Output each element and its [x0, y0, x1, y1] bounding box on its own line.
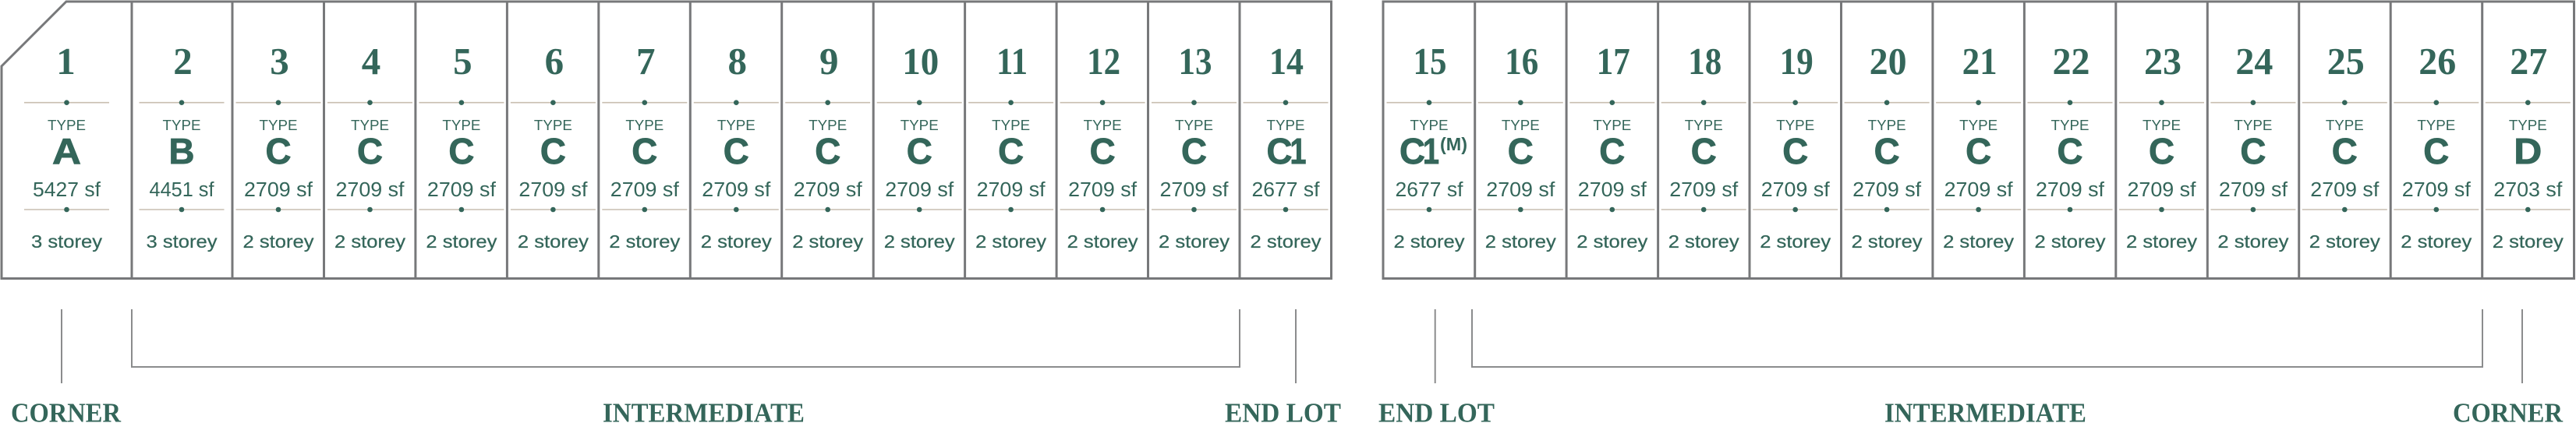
unit 17: 2 storey	[1576, 231, 1648, 252]
unit 19: C	[1782, 131, 1808, 171]
unit 18	[1661, 40, 1746, 252]
unit 13: C	[1181, 131, 1207, 171]
unit 21: 2 storey	[1943, 231, 2015, 252]
unit 24	[2210, 40, 2295, 252]
unit 18: 2 storey	[1668, 231, 1739, 252]
unit 23	[2119, 40, 2204, 252]
unit 16: C	[1508, 131, 1534, 171]
unit 1: 5427 sf	[33, 179, 101, 201]
unit 13	[1152, 40, 1237, 252]
unit 12: 12	[1087, 40, 1120, 83]
unit 16: 2 storey	[1485, 231, 1556, 252]
unit 11: 2 storey	[975, 231, 1047, 252]
unit 3: TYPE	[260, 117, 297, 133]
unit 20: 20	[1870, 40, 1907, 83]
unit 26: C	[2423, 131, 2449, 171]
unit 7: 7	[636, 40, 656, 83]
unit 7: 2 storey	[609, 231, 681, 252]
unit 19: 2709 sf	[1761, 179, 1831, 201]
unit 19: 19	[1780, 40, 1813, 83]
unit 15: 1	[1423, 131, 1439, 171]
unit 27: D	[2514, 131, 2542, 171]
unit 18: 2709 sf	[1669, 179, 1739, 201]
unit 11: 2709 sf	[977, 179, 1046, 201]
unit 25: C	[2332, 131, 2358, 171]
unit 8: TYPE	[717, 117, 755, 133]
unit 20: C	[1874, 131, 1900, 171]
unit 22: TYPE	[2051, 117, 2089, 133]
unit 8: 2709 sf	[702, 179, 771, 201]
unit 22	[2027, 40, 2113, 252]
unit 11	[968, 40, 1053, 252]
unit 26: 26	[2419, 40, 2456, 83]
unit 15: (M)	[1440, 134, 1467, 154]
unit 23: C	[2149, 131, 2174, 171]
unit 5	[419, 40, 504, 252]
unit 6: TYPE	[534, 117, 572, 133]
unit 2: 2	[173, 40, 193, 83]
unit 4: C	[357, 131, 383, 171]
bracket: right intermediate	[1472, 309, 2482, 367]
unit 12: 2 storey	[1067, 231, 1138, 252]
unit 22: 2 storey	[2034, 231, 2106, 252]
unit 13: 2 storey	[1159, 231, 1230, 252]
unit 15: TYPE	[1410, 117, 1448, 133]
unit 24: TYPE	[2234, 117, 2272, 133]
unit 6: 2709 sf	[518, 179, 588, 201]
unit 4	[327, 40, 412, 252]
unit 25: 25	[2327, 40, 2365, 83]
unit 15: 15	[1413, 40, 1447, 83]
unit 7: C	[632, 131, 657, 171]
unit 15: C	[1399, 131, 1425, 171]
unit 23: 23	[2144, 40, 2181, 83]
tick: left end lot	[1295, 309, 1297, 383]
unit 16	[1478, 40, 1563, 252]
unit 3: 3	[270, 40, 289, 83]
unit 12: TYPE	[1084, 117, 1122, 133]
unit 8: 8	[728, 40, 747, 83]
unit 12: 2709 sf	[1068, 179, 1138, 201]
unit 21: TYPE	[1959, 117, 1997, 133]
unit 14: 14	[1269, 40, 1304, 83]
bracket: left intermediate	[132, 309, 1240, 367]
unit 25: TYPE	[2326, 117, 2364, 133]
unit 2: B	[168, 131, 195, 171]
unit 4: 4	[362, 40, 380, 83]
unit 21: C	[1966, 131, 1991, 171]
unit 5: 2709 sf	[427, 179, 497, 201]
unit 9: TYPE	[809, 117, 847, 133]
unit 7: 2709 sf	[610, 179, 680, 201]
unit 10: 10	[902, 40, 939, 83]
unit 20	[1845, 40, 1930, 252]
unit 14: 2677 sf	[1252, 179, 1320, 201]
unit 10: 2709 sf	[885, 179, 954, 201]
building outline: units 1 to 14	[2, 2, 1332, 279]
unit 2: 3 storey	[146, 231, 218, 252]
unit 24: C	[2240, 131, 2266, 171]
unit 26: 2709 sf	[2402, 179, 2472, 201]
unit 23: TYPE	[2143, 117, 2181, 133]
unit 17	[1569, 40, 1654, 252]
unit 21: 21	[1962, 40, 1997, 83]
unit 4: 2709 sf	[335, 179, 405, 201]
unit 27: 2 storey	[2493, 231, 2564, 252]
unit 10: 2 storey	[884, 231, 955, 252]
unit 23: 2 storey	[2126, 231, 2198, 252]
unit 5: 2 storey	[426, 231, 497, 252]
unit 14: 2 storey	[1250, 231, 1322, 252]
unit 25: 2 storey	[2309, 231, 2380, 252]
unit 3: C	[265, 131, 292, 171]
unit 17: 17	[1597, 40, 1630, 83]
unit 14: 1	[1290, 131, 1307, 171]
unit 20: 2709 sf	[1852, 179, 1922, 201]
unit 3	[235, 40, 321, 252]
unit 16: TYPE	[1502, 117, 1540, 133]
unit 24: 2709 sf	[2219, 179, 2288, 201]
unit 9: C	[815, 131, 840, 171]
unit 6: 2 storey	[518, 231, 589, 252]
unit 1: 3 storey	[31, 231, 103, 252]
unit 26: 2 storey	[2401, 231, 2472, 252]
unit 10: C	[907, 131, 932, 171]
unit 1: A	[52, 131, 81, 171]
unit 24: 24	[2235, 40, 2273, 83]
unit 27	[2486, 40, 2571, 252]
unit 22: C	[2057, 131, 2083, 171]
unit 1: 1	[56, 40, 76, 83]
unit 5: C	[448, 131, 474, 171]
unit 11: 11	[996, 40, 1028, 83]
unit 7: TYPE	[625, 117, 663, 133]
unit 27: 2703 sf	[2493, 179, 2563, 201]
unit 4: TYPE	[351, 117, 389, 133]
unit 8: 2 storey	[701, 231, 772, 252]
unit 17: TYPE	[1593, 117, 1631, 133]
unit 3: 2 storey	[242, 231, 314, 252]
unit 15	[1386, 40, 1472, 252]
unit 8	[694, 40, 779, 252]
unit 6	[511, 40, 596, 252]
unit 20: TYPE	[1868, 117, 1906, 133]
unit 15: 2 storey	[1393, 231, 1465, 252]
unit 9: 2709 sf	[794, 179, 863, 201]
unit 6: 6	[545, 40, 564, 83]
unit 14: TYPE	[1267, 117, 1304, 133]
unit 3: 2709 sf	[244, 179, 313, 201]
unit 2	[139, 40, 225, 252]
unit 27: 27	[2510, 40, 2547, 83]
unit 22: 2709 sf	[2036, 179, 2105, 201]
unit 5: 5	[453, 40, 472, 83]
unit 13: TYPE	[1175, 117, 1213, 133]
unit 19	[1753, 40, 1838, 252]
unit 27: TYPE	[2509, 117, 2547, 133]
tick: right corner	[2521, 309, 2523, 383]
unit 25: 2709 sf	[2310, 179, 2380, 201]
unit 16: 2709 sf	[1486, 179, 1555, 201]
unit 4: 2 storey	[334, 231, 406, 252]
unit 18: TYPE	[1685, 117, 1723, 133]
unit 17: 2709 sf	[1578, 179, 1647, 201]
unit 2: TYPE	[163, 117, 200, 133]
unit 17: C	[1599, 131, 1625, 171]
unit 9: 9	[819, 40, 838, 83]
unit 23: 2709 sf	[2127, 179, 2196, 201]
unit 19: TYPE	[1776, 117, 1814, 133]
unit 11: TYPE	[992, 117, 1030, 133]
unit 15: 2677 sf	[1396, 179, 1463, 201]
unit 20: 2 storey	[1852, 231, 1923, 252]
tick: left corner	[61, 309, 62, 383]
unit 18: C	[1691, 131, 1717, 171]
unit 12	[1060, 40, 1145, 252]
unit 14: C	[1266, 131, 1293, 171]
unit 7	[602, 40, 687, 252]
unit 1: TYPE	[48, 117, 86, 133]
unit 1	[24, 40, 109, 252]
unit 6: C	[540, 131, 566, 171]
unit 5: TYPE	[442, 117, 480, 133]
unit 2: 4451 sf	[150, 179, 214, 201]
unit 19: 2 storey	[1760, 231, 1831, 252]
unit 21: 2709 sf	[1944, 179, 2014, 201]
tick: right end lot	[1435, 309, 1436, 383]
unit 11: C	[998, 131, 1024, 171]
unit 21	[1936, 40, 2021, 252]
unit 26	[2394, 40, 2479, 252]
unit 8: C	[724, 131, 749, 171]
building outline: units 15 to 27	[1383, 2, 2574, 279]
unit 13: 13	[1179, 40, 1212, 83]
unit 22: 22	[2052, 40, 2089, 83]
unit 18: 18	[1688, 40, 1721, 83]
unit 16: 16	[1505, 40, 1538, 83]
unit 12: C	[1090, 131, 1116, 171]
unit 25	[2302, 40, 2387, 252]
unit 10	[877, 40, 962, 252]
unit 24: 2 storey	[2217, 231, 2289, 252]
unit 10: TYPE	[901, 117, 939, 133]
unit 26: TYPE	[2417, 117, 2455, 133]
unit 9	[785, 40, 870, 252]
unit 14	[1243, 40, 1329, 252]
unit 13: 2709 sf	[1160, 179, 1229, 201]
unit 9: 2 storey	[792, 231, 864, 252]
